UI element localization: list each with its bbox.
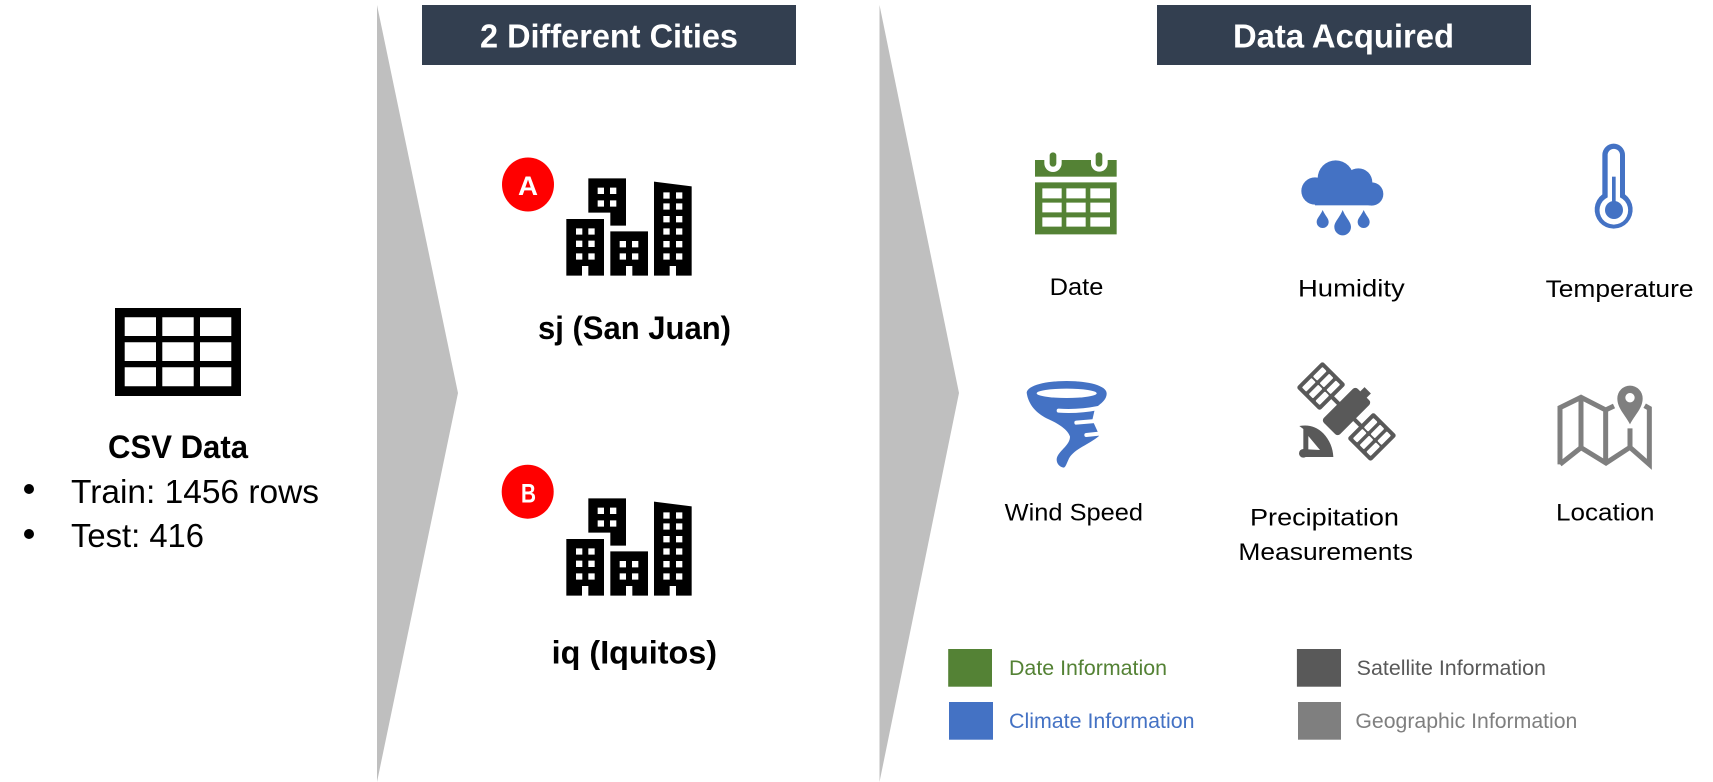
icon: rain cloud xyxy=(1301,160,1383,235)
label: Humidity: Humidity xyxy=(1298,276,1405,303)
heading: 2 Different Cities: 2 Different Cities xyxy=(480,18,738,54)
legend item: Date Information: Date Information xyxy=(1009,657,1167,680)
badge: B xyxy=(502,465,554,519)
badge: A: A xyxy=(518,171,538,201)
heading: Data Acquired xyxy=(1157,5,1531,65)
icon: tornado xyxy=(1027,381,1107,468)
icon: calendar xyxy=(1035,152,1117,234)
heading: Data Acquired: Data Acquired xyxy=(1233,18,1454,54)
icon: thermometer xyxy=(1595,144,1633,229)
icon: data table xyxy=(115,308,241,396)
list: row counts xyxy=(24,473,319,554)
arrow: chevron to cities xyxy=(377,5,458,782)
legend item: Satellite Information xyxy=(1297,649,1546,687)
icon: city buildings B xyxy=(566,498,692,596)
label: Precipitation Measurements xyxy=(1238,505,1413,566)
label: Location: Location xyxy=(1556,500,1654,527)
legend item: Geographic Information xyxy=(1298,702,1577,740)
label: Wind Speed: Wind Speed xyxy=(1005,500,1143,527)
heading: 2 Different Cities xyxy=(422,5,796,65)
label: Precipitation Measurements: Precipitation xyxy=(1250,505,1399,532)
legend xyxy=(948,649,1577,740)
label: sj (San Juan): sj (San Juan) xyxy=(538,310,731,346)
icon: map with pin xyxy=(1560,386,1649,464)
panel: CSV data source xyxy=(24,308,319,554)
panel: cities xyxy=(422,5,796,670)
list: row counts: Train: 1456 rows xyxy=(71,473,319,510)
label: Date: Date xyxy=(1050,274,1103,301)
legend item: Satellite Information: Satellite Information xyxy=(1357,657,1546,680)
list: row counts: Test: 416 xyxy=(71,517,204,554)
label: iq (Iquitos): iq (Iquitos) xyxy=(552,634,717,670)
heading: CSV Data: CSV Data xyxy=(108,429,248,465)
arrow: chevron to data xyxy=(880,5,959,782)
legend item: Geographic Information: Geographic Information xyxy=(1355,710,1577,733)
label: Temperature: Temperature xyxy=(1546,276,1694,303)
icon: city buildings A xyxy=(566,178,692,276)
badge: B: B xyxy=(521,479,536,509)
icon: satellite xyxy=(1292,353,1405,466)
label: Precipitation Measurements: Measurements xyxy=(1238,539,1413,566)
legend item: Date Information xyxy=(948,649,1167,687)
panel: data acquired xyxy=(948,5,1694,740)
legend item: Climate Information xyxy=(949,702,1194,740)
badge: A xyxy=(502,158,554,212)
legend item: Climate Information: Climate Information xyxy=(1009,710,1194,733)
